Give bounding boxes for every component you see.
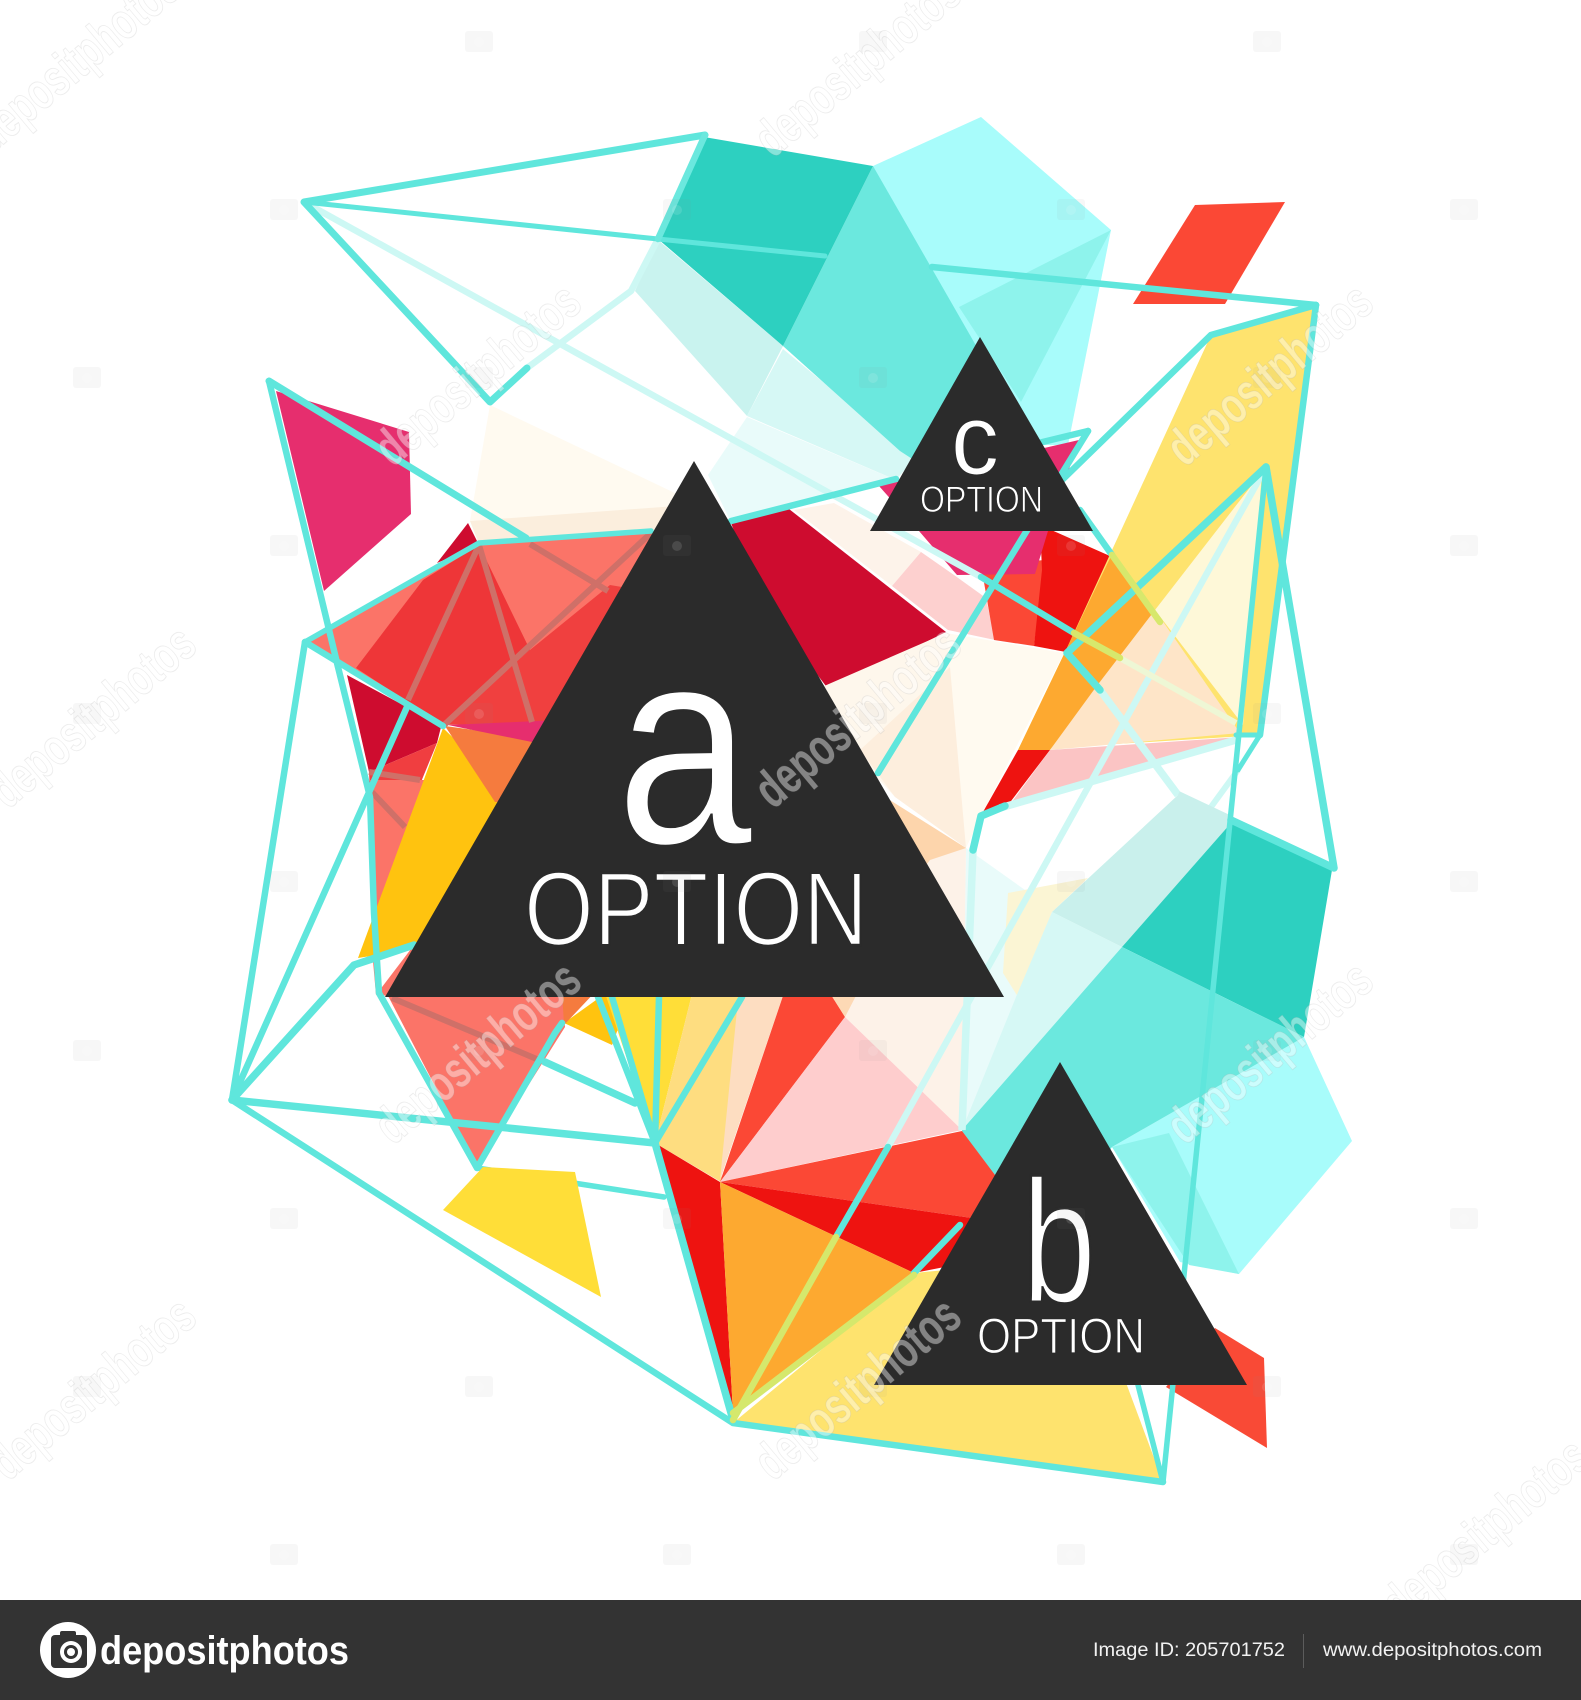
magenta facet: [879, 440, 1079, 575]
wireframe lines: [232, 135, 1334, 1482]
cream left facet: [815, 633, 950, 797]
red facet: [720, 990, 845, 1182]
yellow band: [1018, 307, 1316, 750]
pale pink facet: [892, 552, 995, 640]
yellow right band: [983, 307, 1316, 812]
red inner facet: [356, 545, 530, 725]
pale teal band: [1052, 795, 1231, 947]
orange facet: [720, 1182, 914, 1413]
orange sliver: [562, 990, 597, 1025]
salmon lower tip: [385, 990, 565, 1167]
crimson lower facet: [347, 675, 441, 772]
dark triangle c with label: [870, 337, 1093, 531]
light cream overlap: [1155, 472, 1262, 725]
OPTION a: OPTION: [524, 851, 868, 968]
red parallelogram top right: [1133, 202, 1285, 304]
magenta quad left: [276, 391, 411, 591]
orange overlap: [1018, 556, 1155, 750]
red overlap: [983, 750, 1050, 812]
website url: www.depositphotos.com: [1322, 1640, 1542, 1661]
peach facet: [720, 990, 785, 1180]
cream facet: [470, 405, 700, 521]
crimson large facet: [731, 509, 946, 690]
icon: camera logo: [40, 1622, 96, 1678]
gold facet: [358, 728, 520, 958]
dark teal facet: [658, 137, 873, 346]
image id: Image ID: 205701752: [1093, 1640, 1285, 1661]
depositphotos text watermarks: depositphotos: [743, 1286, 972, 1491]
magenta sliver: [448, 720, 560, 742]
light cyan pentagon: [873, 117, 1111, 445]
red shard bottom right: [1166, 1328, 1267, 1448]
letter b: b: [1022, 1145, 1096, 1340]
lightest teal facet: [708, 417, 896, 518]
deep peach facet: [885, 797, 966, 890]
small peach facet: [828, 990, 859, 1017]
OPTION c: OPTION: [920, 479, 1043, 520]
pink facet: [720, 1017, 962, 1182]
dark triangle a with label: [385, 461, 1004, 997]
depositphotos text watermarks: depositphotos: [1155, 950, 1384, 1155]
triangle c: [870, 337, 1093, 531]
bright red band: [720, 1182, 1000, 1273]
cream strip: [794, 503, 921, 586]
salmon lower body: [370, 780, 425, 1000]
left red cluster: [305, 523, 660, 1167]
bottom centre fan of facets: [562, 848, 1163, 1482]
depositphotos text watermarks: depositphotos: [363, 950, 592, 1155]
OPTION b: OPTION: [977, 1308, 1145, 1364]
divider: [1303, 1634, 1304, 1668]
lightest teal facet: [962, 848, 1025, 1130]
peach facet: [860, 667, 966, 848]
dark teal facet: [1122, 823, 1332, 1037]
very pale teal facet: [962, 912, 1122, 1130]
depositphotos text watermarks: depositphotos: [1155, 272, 1384, 477]
medium teal facet: [962, 947, 1304, 1250]
bright red facet: [1034, 525, 1110, 652]
yellow base facet: [733, 1260, 1163, 1482]
lower teal crystal cluster: [962, 795, 1352, 1274]
cream white facet: [946, 633, 1064, 850]
peach overlap: [1050, 610, 1240, 750]
orange-red facet: [981, 560, 1045, 646]
letter a: a: [616, 588, 754, 903]
centre right facets: [731, 440, 1110, 890]
top teal crystal cluster: [635, 117, 1111, 518]
crimson tip: [437, 523, 479, 563]
gold sliver: [564, 990, 625, 1045]
triangle b: [874, 1062, 1247, 1385]
cyan inner facet: [959, 230, 1111, 402]
light cyan pentagon: [1112, 1037, 1352, 1274]
triangle a: [385, 461, 1004, 997]
cyan inner facet: [1112, 1133, 1239, 1274]
letter c: c: [951, 384, 999, 496]
medium teal facet: [783, 166, 990, 490]
red upper facet: [720, 1131, 1010, 1222]
very pale teal facet: [747, 349, 915, 480]
cream facet: [828, 848, 966, 1130]
logo wordmark: depositphotos: [100, 1629, 349, 1673]
bright red left facet: [655, 1143, 733, 1413]
pale yellow facet: [1003, 878, 1088, 997]
red lower facet: [369, 743, 437, 827]
dark triangle b with label: [874, 1062, 1247, 1385]
pink overlap: [1011, 737, 1240, 803]
yellow facet: [604, 990, 693, 1143]
depositphotos text watermarks: depositphotos: [743, 614, 972, 819]
orange facet: [445, 726, 560, 802]
salmon facet: [305, 533, 660, 726]
cream triangle top centre: [470, 405, 700, 544]
footer bar: [0, 1600, 1581, 1700]
light yellow facet: [655, 990, 740, 1182]
yellow free shard: [443, 1167, 601, 1297]
depositphotos text watermarks: depositphotos: [363, 272, 592, 477]
red right facet: [443, 585, 640, 725]
pale teal band: [635, 240, 783, 416]
cream shadow strip: [470, 505, 690, 544]
